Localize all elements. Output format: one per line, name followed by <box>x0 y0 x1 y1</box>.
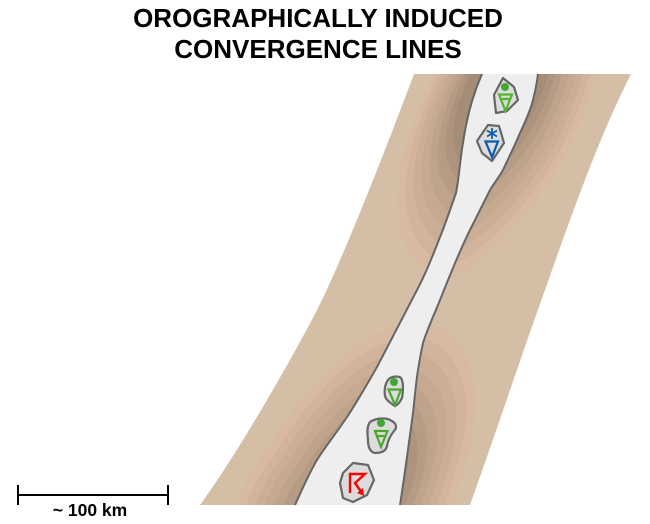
cell 3: rain shower <box>385 376 403 406</box>
scale bar: ~ 100 km <box>53 500 127 520</box>
title: OROGRAPHICALLY INDUCED <box>133 3 503 33</box>
cell 5: thunderstorm <box>340 463 374 502</box>
title: CONVERGENCE LINES <box>174 34 462 64</box>
cell 2: snow shower <box>477 125 504 161</box>
scale bar <box>18 485 168 520</box>
convergence corridor <box>295 74 538 505</box>
cell 4: rain and hail shower <box>367 418 396 453</box>
mountain band <box>190 74 640 505</box>
upper mountain contours <box>406 74 590 262</box>
lower mountain contours <box>246 339 466 505</box>
title <box>133 3 503 64</box>
cell 1: rain and hail shower <box>494 78 518 113</box>
